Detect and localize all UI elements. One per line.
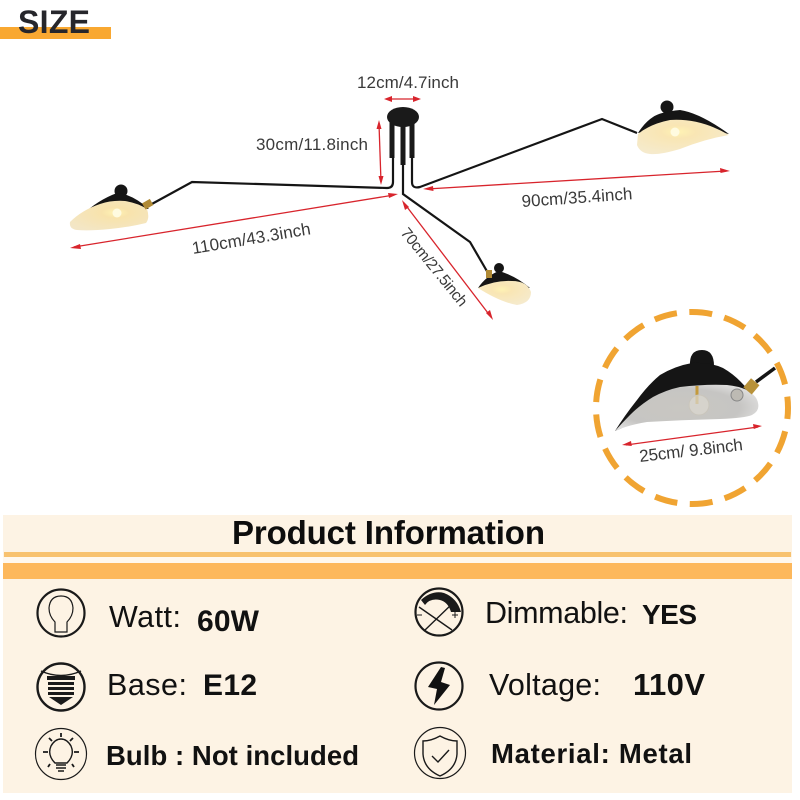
row: voltage: Voltage: <box>489 668 601 702</box>
icon: bulb outline <box>38 590 84 636</box>
icon: lit bulb <box>36 728 86 780</box>
left lamp <box>70 184 153 230</box>
row: material: Material: Metal <box>491 738 692 769</box>
label: 25cm: 25cm/ 9.8inch <box>638 435 744 466</box>
row: bulb <box>36 728 359 780</box>
ceiling lamp diagram <box>70 100 729 305</box>
row: base <box>38 664 257 710</box>
icon: screw base <box>38 664 84 710</box>
arrow: 30cm height <box>376 120 384 185</box>
arrow: 110cm length <box>70 193 398 249</box>
detail callout: shade diameter <box>596 312 788 504</box>
label: 30cm: 30cm/11.8inch <box>256 135 368 154</box>
row: voltage: 110V <box>633 667 705 702</box>
size heading: SIZE <box>18 4 90 40</box>
label: 90cm: 90cm/35.4inch <box>521 184 633 211</box>
left arm <box>150 155 393 205</box>
right lamp <box>637 100 729 154</box>
panel heading: Product Information <box>232 514 545 551</box>
middle arm <box>403 160 488 273</box>
dimension labels <box>191 73 633 310</box>
row: voltage <box>416 662 705 710</box>
heading band rule <box>4 552 791 557</box>
arrow: 90cm length <box>423 168 730 191</box>
row: watt: Watt: <box>109 600 181 634</box>
arrow: 70cm length <box>402 200 493 320</box>
row: dimmable: YES <box>642 599 697 630</box>
label: 110cm: 110cm/43.3inch <box>191 219 312 258</box>
right arm <box>412 119 637 187</box>
panel: product information <box>3 514 792 793</box>
dashed circle <box>596 312 788 504</box>
row: material <box>414 728 692 778</box>
ceiling canopy and stems <box>387 107 419 165</box>
row: watt: 60W <box>197 605 260 638</box>
icon: lightning bolt <box>416 662 462 710</box>
icon: shield check <box>414 728 466 778</box>
row: base: Base: <box>107 668 187 702</box>
row: base: E12 <box>203 669 257 702</box>
arrow: 25cm <box>622 424 762 446</box>
size heading <box>0 4 111 40</box>
middle lamp <box>478 263 531 305</box>
row: watt <box>38 590 260 638</box>
row: dimmable: Dimmable: <box>485 596 628 630</box>
icon: dimmer dial <box>416 588 462 636</box>
dimension arrows <box>70 96 730 320</box>
row: bulb: Bulb : Not included <box>106 740 359 771</box>
row: dimmable <box>416 588 697 636</box>
label: 70cm: 70cm/27.5inch <box>397 225 471 310</box>
arrow: 12cm width <box>384 96 421 102</box>
lamp shade close-up <box>615 350 775 431</box>
label: 12cm: 12cm/4.7inch <box>357 73 459 92</box>
